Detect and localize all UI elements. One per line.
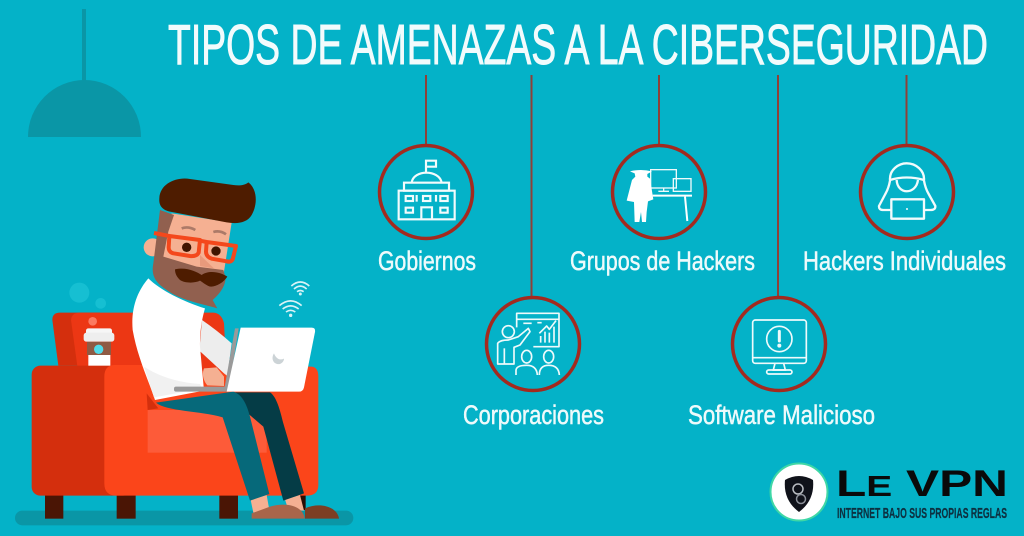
icon: government building [399, 161, 455, 219]
laptop [174, 328, 315, 392]
connector lines [426, 75, 906, 298]
label: Software Malicioso [688, 400, 875, 430]
item: Corporaciones [463, 298, 604, 430]
item: Software Malicioso [688, 298, 875, 430]
icon: presenter with chart [498, 313, 559, 375]
floor shadow [15, 511, 353, 525]
logo: Le VPN [770, 463, 1008, 522]
hand [203, 367, 224, 386]
brand name: L E VPN [836, 463, 1008, 504]
icon: shield badge [770, 464, 828, 520]
icon: ceiling lamp [28, 9, 141, 137]
icon: spy at desk [627, 170, 692, 222]
item: Hackers Individuales [803, 146, 1006, 276]
label: Gobiernos [378, 246, 476, 276]
legs and shoes [156, 392, 339, 519]
arm [199, 320, 232, 376]
item: Grupos de Hackers [570, 146, 755, 276]
label: Grupos de Hackers [570, 246, 755, 276]
icon: hooded hacker [879, 163, 935, 219]
coffee cup [69, 283, 114, 366]
torso [132, 278, 205, 400]
item: Gobiernos [378, 146, 476, 276]
icon: wifi signals [279, 282, 309, 316]
illustration: man on sofa with laptop [15, 179, 353, 525]
icon: monitor with warning [753, 320, 806, 374]
shirt fold [144, 367, 202, 397]
label: Corporaciones [463, 400, 604, 430]
sofa [32, 313, 318, 519]
head [144, 179, 256, 308]
